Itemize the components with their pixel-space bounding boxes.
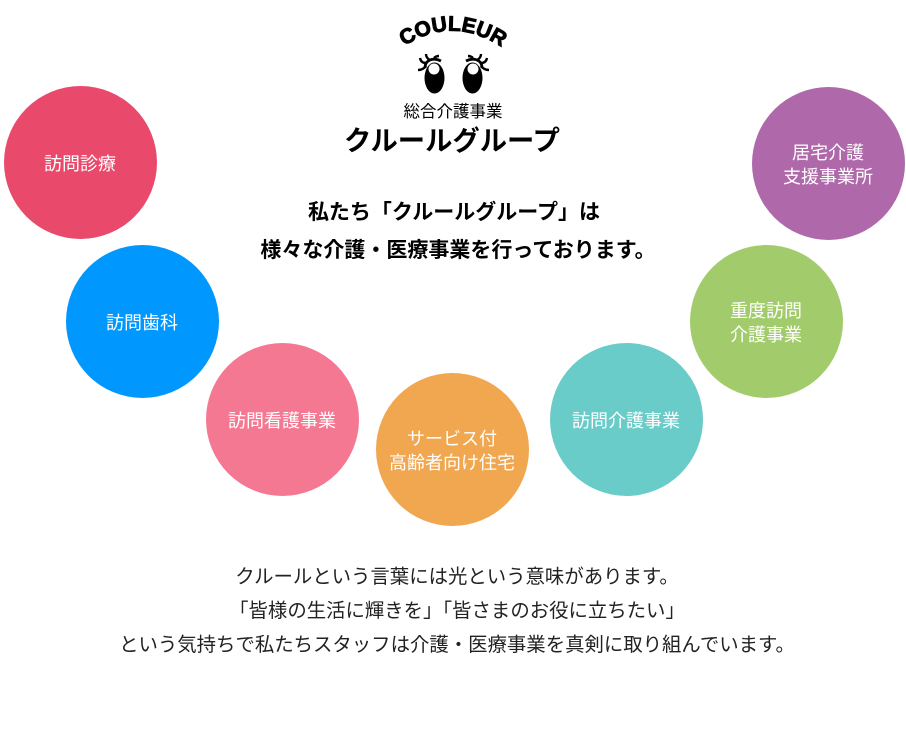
- logo group name: クルールグループ: [344, 125, 560, 156]
- logo wordmark: COULEUR: [400, 16, 507, 48]
- intro heading: 様々な介護・医療事業を行っております。: [260, 239, 656, 262]
- circle: senior housing: 高齢者向け住宅: [389, 452, 515, 472]
- logo subtitle: 総合介護事業: [404, 103, 502, 121]
- circle: home nursing: [206, 343, 359, 496]
- circle: home nursing: 訪問看護事業: [228, 410, 336, 430]
- circle: senior housing: サービス付: [407, 428, 497, 448]
- circle: home visit medical: [4, 86, 157, 239]
- circle: home care: [550, 343, 703, 496]
- intro heading: 私たち「クルールグループ」は: [308, 201, 600, 224]
- closing message: という気持ちで私たちスタッフは介護・医療事業を真剣に取り組んでいます。: [119, 634, 795, 656]
- closing message: クルールという言葉には光という意味があります。: [235, 566, 679, 588]
- circle: care support office: [752, 87, 905, 240]
- circle: home care: 訪問介護事業: [572, 410, 680, 430]
- circle: care support office: 支援事業所: [783, 166, 873, 186]
- logo: COULEUR: [400, 16, 507, 94]
- circle: severe disability care: 介護事業: [730, 324, 802, 344]
- circle: home dental: [66, 245, 219, 398]
- circle: home visit medical: 訪問診療: [44, 154, 116, 174]
- circle: care support office: 居宅介護: [792, 142, 864, 162]
- closing message: 「皆様の生活に輝きを」「皆さまのお役に立ちたい」: [229, 600, 685, 622]
- circle: severe disability care: [690, 245, 843, 398]
- circle: senior housing: [376, 373, 529, 526]
- icon: left eye: [418, 54, 444, 94]
- icon: right eye: [462, 54, 489, 94]
- circle: severe disability care: 重度訪問: [730, 300, 802, 320]
- intro heading: [260, 200, 656, 262]
- closing message: [119, 566, 795, 656]
- circle: home dental: 訪問歯科: [106, 312, 178, 332]
